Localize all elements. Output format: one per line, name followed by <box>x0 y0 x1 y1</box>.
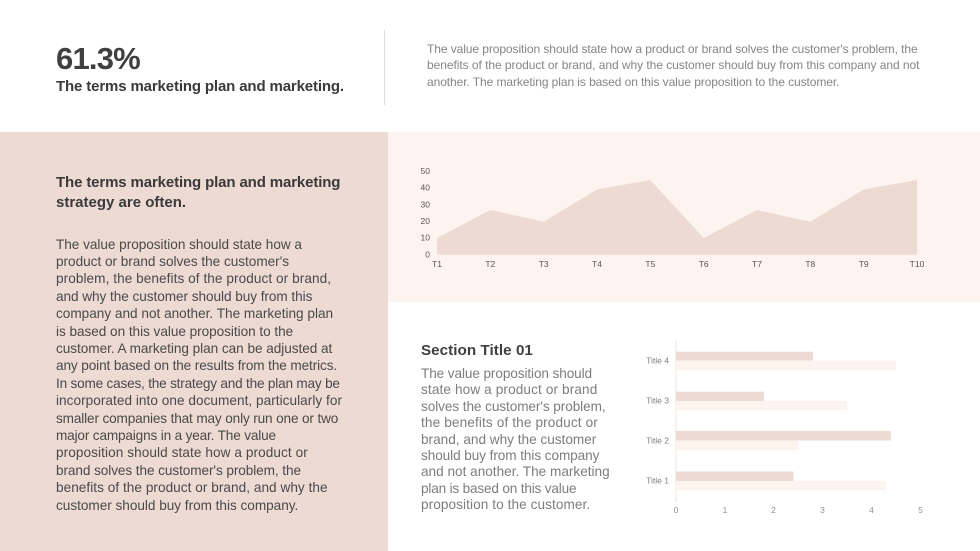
y axis labels <box>421 166 430 260</box>
category labels <box>646 356 669 486</box>
category labels: Title 2 <box>646 436 669 446</box>
x axis labels: T8 <box>805 259 816 269</box>
value axis labels: 5 <box>918 505 923 515</box>
section body text: and not another. The marketing <box>421 464 610 479</box>
left panel body text: company and not another. The marketing plan <box>56 306 333 321</box>
vertical divider <box>384 30 385 105</box>
y axis labels: 0 <box>425 250 430 260</box>
area chart <box>420 166 925 269</box>
left panel body text: The value proposition should state how a <box>56 236 302 252</box>
left panel body text: and why the customer should buy from this <box>56 289 312 304</box>
x axis labels: T1 <box>432 259 442 269</box>
left panel body text: major campaigns in a year. The value <box>56 428 276 443</box>
value axis labels: 1 <box>723 505 728 515</box>
left panel body text <box>56 236 342 513</box>
section body text: proposition to the customer. <box>421 497 590 512</box>
left panel body text: In some cases, the strategy and the plan may be <box>56 376 340 391</box>
statistic: 61.3%: 61.3% <box>56 41 140 76</box>
value axis labels: 4 <box>869 505 874 515</box>
y axis labels: 20 <box>421 216 430 226</box>
top description text <box>427 42 920 89</box>
statistic caption: The terms marketing plan and marketing. <box>56 78 344 95</box>
left panel body text: customer. A marketing plan can be adjusted at <box>56 341 332 356</box>
x axis labels: T6 <box>699 259 709 269</box>
top description text: benefits of the product or brand, and why the customer should buy from this company and not <box>427 58 919 72</box>
area series <box>437 180 917 255</box>
value axis labels <box>674 505 923 515</box>
section body text: the benefits of the product or <box>421 415 598 430</box>
section body text: plan is based on this value <box>421 481 576 496</box>
horizontal bar chart <box>646 340 923 515</box>
x axis labels: T4 <box>592 259 602 269</box>
category labels: Title 3 <box>646 396 669 406</box>
left panel heading: The terms marketing plan and marketing <box>56 174 340 190</box>
section body text: state how a product or brand <box>421 382 597 397</box>
x axis labels <box>432 259 925 269</box>
section body text: brand, and why the customer <box>421 432 596 447</box>
left panel body text: customer should buy from this company. <box>56 498 298 512</box>
top description text: another. The marketing plan is based on this value proposition to the customer. <box>427 75 839 89</box>
top description text: The value proposition should state how a product or brand solves the customer's problem, the <box>427 42 918 56</box>
bars: Title 2 <box>676 431 891 450</box>
x axis labels: T10 <box>910 259 925 269</box>
bars: Title 1 <box>676 472 886 490</box>
left panel body text: proposition should state how a product or <box>56 445 308 460</box>
y axis labels: 30 <box>421 199 430 209</box>
left panel body text: benefits of the product or brand, and why the <box>56 480 328 495</box>
bars: Title 3 <box>676 392 847 410</box>
bars: Title 4 <box>676 352 896 370</box>
x axis labels: T2 <box>485 259 496 269</box>
left panel body text: brand solves the customer's problem, the <box>56 463 301 478</box>
section body text <box>421 366 610 512</box>
value axis labels: 2 <box>771 505 776 515</box>
left panel body text: smaller companies that may only run one or two <box>56 410 338 426</box>
panel: left background <box>0 132 388 551</box>
left panel body text: incorporated into one document, particularly for <box>56 393 342 408</box>
panel: area chart background <box>388 132 980 302</box>
y axis labels: 10 <box>421 233 430 243</box>
section body text: should buy from this company <box>421 448 599 463</box>
y axis labels: 50 <box>421 166 430 176</box>
x axis labels: T3 <box>539 259 549 269</box>
left panel body text: problem, the benefits of the product or brand, <box>56 271 331 286</box>
section body text: solves the customer's problem, <box>421 399 606 414</box>
category labels: Title 4 <box>646 356 669 366</box>
value axis labels: 3 <box>820 505 825 515</box>
x axis labels: T7 <box>752 259 762 269</box>
x axis labels: T9 <box>859 259 869 269</box>
left panel heading: strategy are often. <box>56 194 186 211</box>
left panel body text: any point based on the results from the metrics. <box>56 358 337 373</box>
left panel body text: is based on this value proposition to the <box>56 324 293 338</box>
left panel heading <box>56 174 340 211</box>
section body text: The value proposition should <box>421 366 592 381</box>
y axis labels: 40 <box>421 183 430 193</box>
x axis labels: T5 <box>645 259 656 269</box>
category labels: Title 1 <box>646 476 669 486</box>
value axis labels: 0 <box>674 505 679 515</box>
left panel body text: product or brand solves the customer's <box>56 254 289 269</box>
section title: Section Title 01 <box>421 342 533 359</box>
